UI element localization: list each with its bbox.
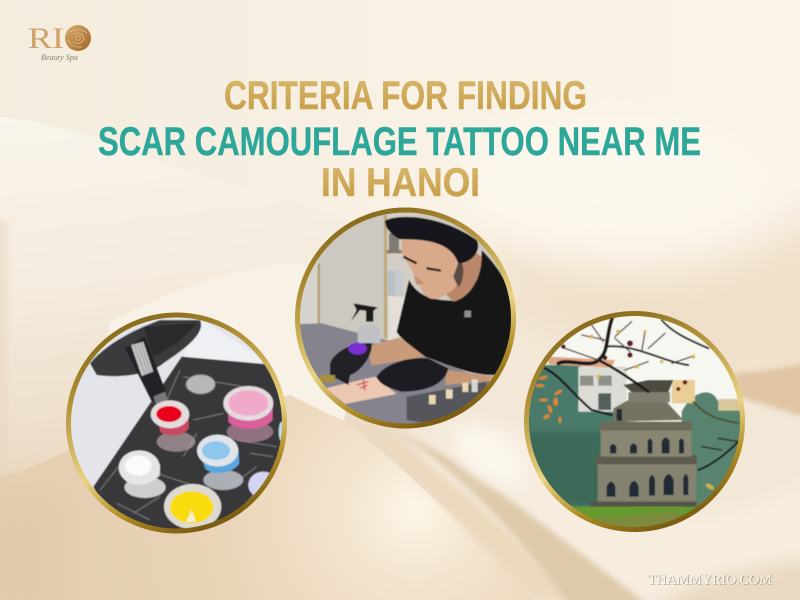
spray bottle: [351, 303, 381, 343]
tattoo machine: [348, 343, 367, 355]
gold ring: [526, 314, 742, 530]
client arm with scar: [325, 377, 397, 404]
blue ink cap: [197, 435, 243, 490]
gloved hands: [330, 343, 372, 385]
needle cartridge: [125, 337, 167, 402]
artist arms: [367, 337, 425, 366]
watermark: THAMMYRIO.COM: THAMMYRIO.COM: [649, 574, 773, 589]
autumn leaves: [535, 330, 715, 491]
empty cap: [186, 375, 215, 394]
gold ring: [68, 315, 284, 531]
instrument tray: [407, 382, 487, 424]
watermark: THAMMYRIO.COM: THAMMYRIO.COM: [648, 573, 773, 588]
background building: [578, 367, 627, 412]
logo: RIO Beauty Spa: [28, 22, 91, 62]
face: [402, 237, 464, 299]
lilac ink cap: [248, 470, 270, 496]
title line 3: IN HANOI: [321, 161, 480, 205]
title: [98, 74, 701, 205]
pink ink cap: [223, 386, 273, 442]
white ink cap: [119, 450, 166, 498]
tree line: [529, 364, 629, 508]
right side waves: [733, 358, 800, 425]
lawn: [572, 506, 698, 522]
glove: [90, 320, 201, 376]
treatment bed: [300, 323, 490, 424]
black shirt: [397, 250, 518, 375]
tower: [590, 380, 697, 507]
branches: [545, 315, 738, 470]
logo: RIO Beauty Spa: RI: [28, 22, 64, 55]
gold ring: [298, 210, 514, 426]
ink palette: [93, 357, 293, 537]
central folds: [343, 420, 570, 600]
yellow ink cap: [164, 484, 221, 529]
hair: [385, 217, 478, 263]
photo circle: ink caps: [63, 310, 293, 537]
photo circle: Turtle Tower, Hanoi: [522, 312, 752, 537]
photo circle: tattoo artist at work: [295, 210, 518, 433]
title line 1: CRITERIA FOR FINDING: [224, 74, 587, 118]
neck and ear: [446, 252, 482, 302]
red ink cap: [151, 400, 195, 452]
logo: RIO Beauty Spa: Beauty Spa: [41, 53, 78, 62]
lower left tan drape: [0, 395, 533, 600]
